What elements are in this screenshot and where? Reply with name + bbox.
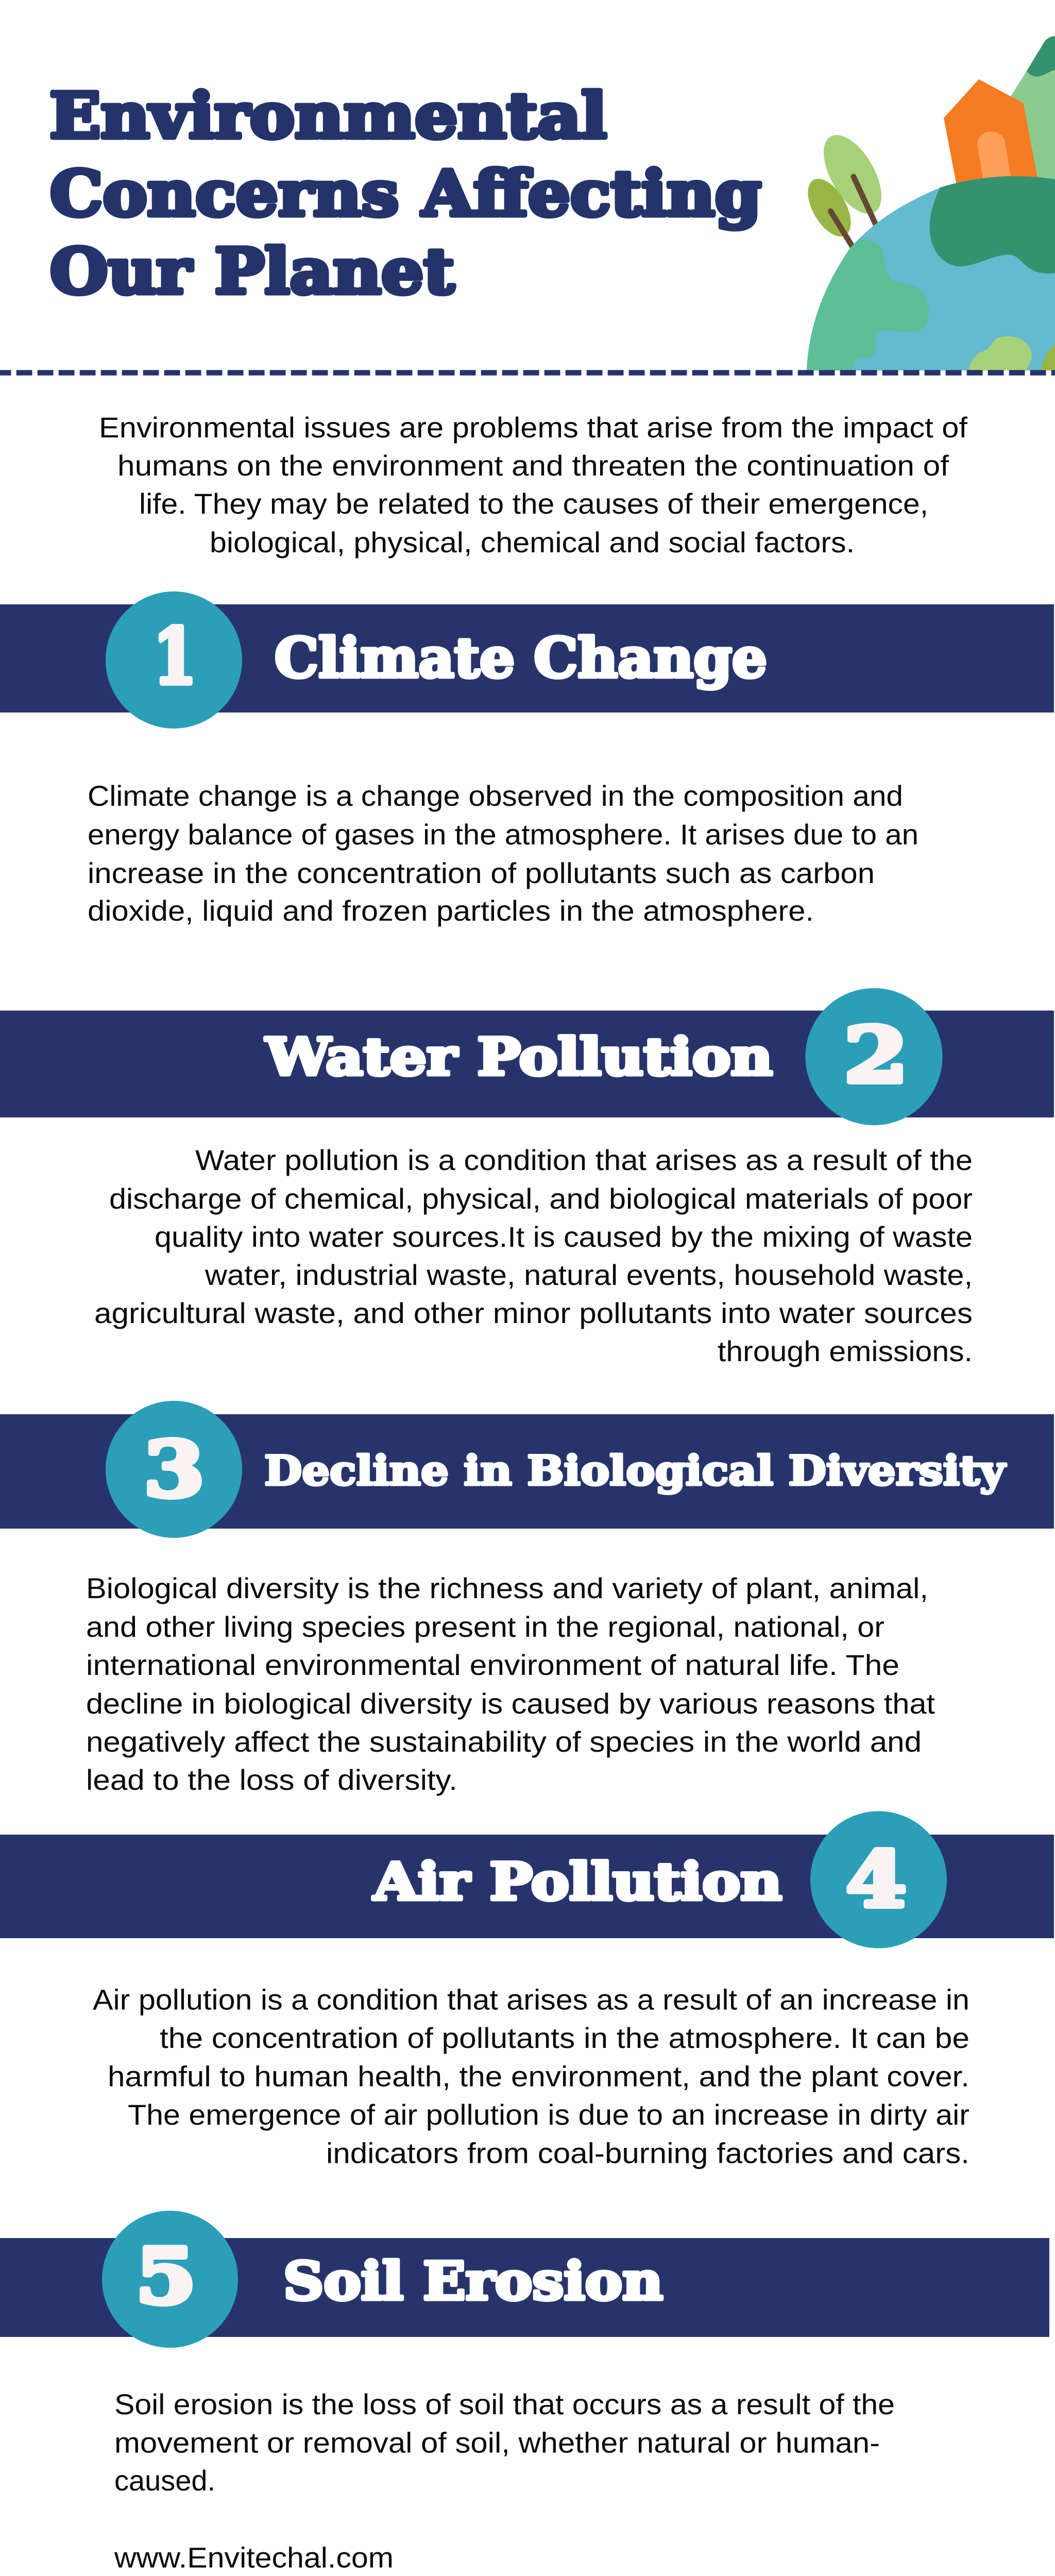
number circle 4: [810, 1811, 947, 1948]
body: soil erosion: Soil erosion is the loss of soil that occurs as a result of the: [114, 2388, 895, 2420]
number 1: 1: [153, 612, 197, 701]
body: soil erosion: [114, 2388, 895, 2497]
panel: water pollution: [0, 988, 1054, 1367]
heading: air pollution: Air Pollution: [373, 1852, 782, 1912]
body: decline in biological diversity: lead to the loss of diversity.: [86, 1764, 457, 1796]
website url: www.Envitechal.com: [114, 2541, 394, 2574]
intro text: biological, physical, chemical and social factors.: [210, 526, 855, 558]
panel: air pollution: [0, 1811, 1054, 2169]
body: climate change: Climate change is a change observed in the composition and: [88, 779, 903, 812]
body: climate change: increase in the concentration of pollutants such as carbon: [88, 857, 875, 889]
number 2: 2: [844, 1010, 908, 1100]
body: air pollution: the concentration of pollutants in the atmosphere. It can be: [160, 2022, 969, 2054]
panel: decline in biological diversity: [0, 1401, 1054, 1796]
panel: soil erosion: [0, 2211, 1049, 2574]
number circle 3: [106, 1401, 242, 1538]
intro text: life. They may be related to the causes of their emergence,: [139, 487, 928, 520]
body: soil erosion: movement or removal of soil, whether natural or human-: [114, 2427, 880, 2459]
heading bar 4: [0, 1835, 1054, 1938]
icon: house: [944, 79, 1038, 185]
body: air pollution: The emergence of air pollution is due to an increase in dirty air: [128, 2098, 969, 2131]
number 5: 5: [135, 2231, 196, 2321]
body: soil erosion: caused.: [114, 2464, 215, 2497]
body: air pollution: [93, 1984, 969, 2169]
heading bar 3: [0, 1414, 1054, 1529]
heading bar 2: [0, 1011, 1054, 1117]
heading bar 5: [0, 2238, 1049, 2337]
heading: soil erosion: Soil Erosion: [283, 2250, 663, 2312]
icon: globe: [807, 176, 1055, 370]
body: climate change: [88, 779, 918, 927]
icon: dark tree: [799, 172, 860, 249]
number 4: 4: [846, 1835, 907, 1924]
body: decline in biological diversity: Biological diversity is the richness and variety of plant, animal,: [86, 1572, 928, 1604]
title: Concerns Affecting: [50, 157, 761, 230]
title: Our Planet: [50, 234, 454, 308]
body: decline in biological diversity: decline in biological diversity is caused by various reasons that: [86, 1687, 935, 1720]
body: water pollution: Water pollution is a condition that arises as a result of the: [195, 1144, 973, 1176]
intro text: Environmental issues are problems that arise from the impact of: [99, 411, 967, 444]
body: water pollution: discharge of chemical, physical, and biological materials of poor: [109, 1182, 973, 1215]
number circle 5: [102, 2211, 238, 2348]
heading: water pollution: Water Pollution: [265, 1027, 773, 1087]
icon: light tree: [812, 126, 893, 227]
body: air pollution: harmful to human health, the environment, and the plant cover.: [108, 2060, 969, 2093]
illustration: earth with house, mountain and trees: [799, 36, 1055, 370]
body: climate change: dioxide, liquid and frozen particles in the atmosphere.: [88, 894, 814, 927]
intro text: [99, 411, 967, 558]
title: Environmental: [49, 79, 607, 152]
heading bar 1: [0, 604, 1054, 713]
body: decline in biological diversity: negatively affect the sustainability of species in the world and: [86, 1725, 922, 1758]
body: water pollution: quality into water sources.It is caused by the mixing of waste: [155, 1221, 973, 1253]
body: water pollution: water, industrial waste, natural events, household waste,: [205, 1259, 973, 1291]
body: decline in biological diversity: and other living species present in the regional, national, or: [86, 1611, 884, 1643]
number circle 2: [806, 988, 943, 1125]
number circle 1: [106, 591, 242, 728]
heading: climate change: Climate Change: [275, 625, 767, 690]
body: water pollution: agricultural waste, and other minor pollutants into water sources: [94, 1297, 973, 1329]
body: water pollution: [94, 1144, 973, 1367]
body: water pollution: through emissions.: [718, 1335, 973, 1367]
body: decline in biological diversity: [86, 1572, 935, 1796]
icon: mountain: [1010, 36, 1055, 180]
heading: decline in biological diversity: Decline in Biological Diversity: [264, 1447, 1006, 1495]
body: air pollution: indicators from coal-burning factories and cars.: [326, 2137, 969, 2169]
intro text: humans on the environment and threaten the continuation of: [117, 449, 949, 482]
body: climate change: energy balance of gases in the atmosphere. It arises due to an: [88, 818, 918, 851]
number 3: 3: [144, 1425, 205, 1514]
body: decline in biological diversity: international environmental environment of natural life. The: [86, 1649, 899, 1681]
title: [49, 79, 761, 308]
panel: climate change: [0, 591, 1054, 927]
body: air pollution: Air pollution is a condition that arises as a result of an increase in: [93, 1984, 969, 2015]
